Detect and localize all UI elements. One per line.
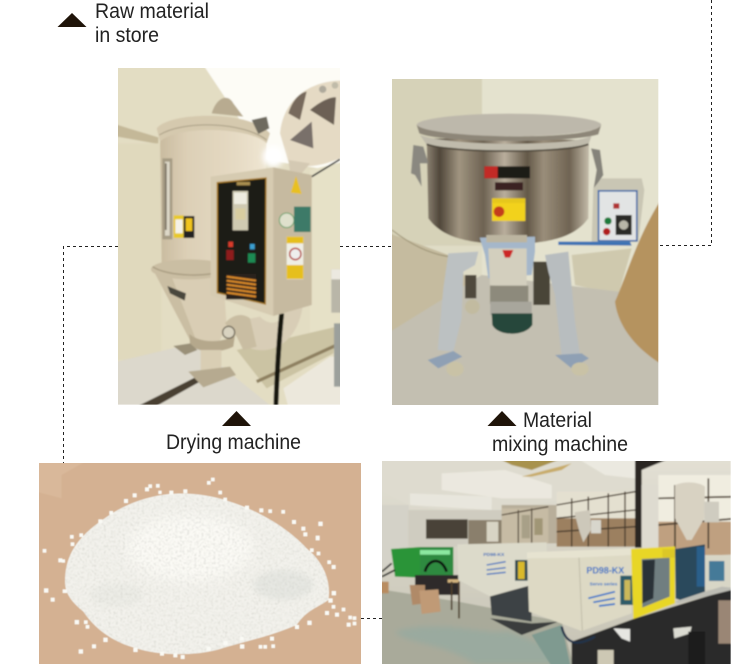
icon: triangle drying machine [222,411,251,426]
control box [592,178,644,242]
sack [614,202,658,363]
casters back [465,299,480,314]
yellow door [631,546,675,619]
label: material mixing machine: mixing machine [492,433,628,456]
photo: white plastic pellets [30,455,370,664]
control unit [675,544,705,600]
label: drying machine: Drying machine [166,431,301,454]
fan [280,81,343,166]
photo: injection moulding workshop: PD98-KX [586,565,624,575]
front machine [526,558,632,630]
drum [427,138,589,244]
middle machine [490,585,532,622]
outlet [480,237,535,278]
legs [438,252,478,352]
dashed connector: drying machine to pellets [64,246,118,463]
label: raw material in store: in store [95,24,159,47]
green machine [391,547,420,578]
ceiling [375,455,635,515]
control box [210,167,274,316]
photo: drying machine [118,68,340,405]
boxes [410,585,425,605]
side container [330,278,340,314]
dashed connector: raw material to mixing machine [659,0,712,246]
photo: injection moulding workshop [375,455,738,664]
label: material mixing machine: Material [523,409,592,432]
hoppers [574,510,591,542]
dashed connector: mixing machine to drying machine [340,246,392,248]
photo: material mixing machine [385,75,668,412]
base [572,587,738,664]
windows [502,508,548,543]
label: material mixing machine [492,409,628,456]
label: raw material in store [95,0,209,47]
icon: triangle raw material [58,13,86,27]
photo: injection moulding workshop: PD98-KX [483,552,505,558]
floor [375,588,575,664]
hose [250,308,302,350]
hopper [160,121,267,267]
sight glass [162,158,172,239]
dashed connector: pellets to injection machines [361,618,382,620]
photo: injection moulding workshop: Servo series [590,582,618,587]
label: raw material in store: Raw material [95,0,209,23]
icon: triangle mixing machine [488,411,516,426]
